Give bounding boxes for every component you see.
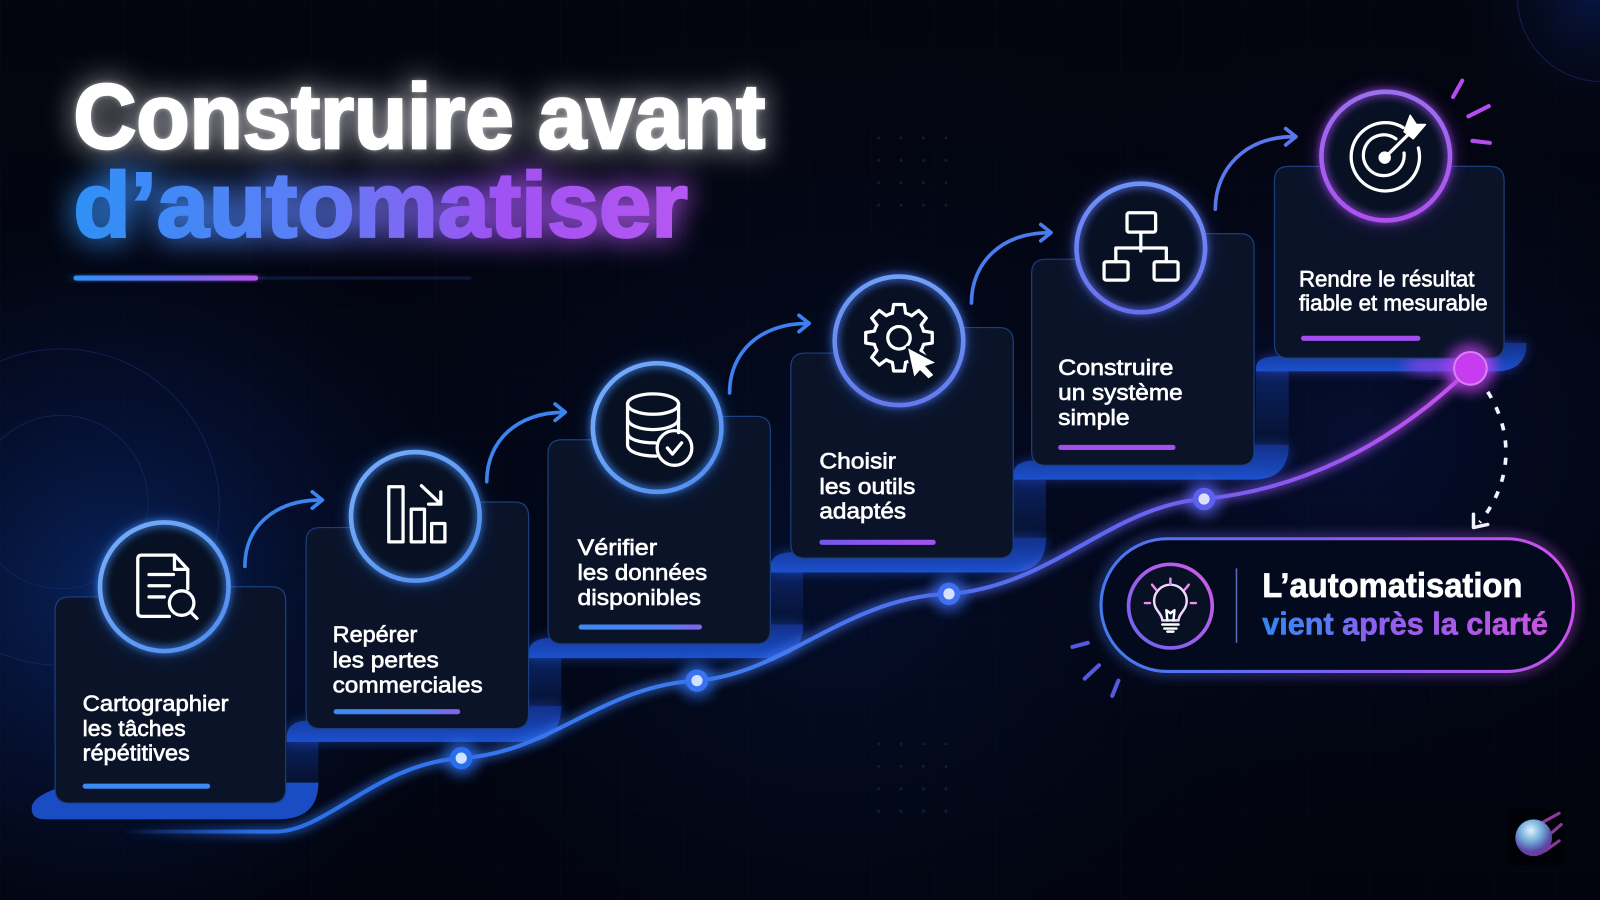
badge 4: gear and cursor [835,277,963,405]
card 5 accent bar [1058,445,1176,450]
icon: hierarchy [1104,213,1178,280]
card 4 text: les outils [819,474,915,499]
progress node 4 [1187,482,1221,516]
card 1 [55,587,286,803]
card 1 text: répétitives [83,741,190,766]
card 6 text: fiable et mesurable [1299,291,1488,316]
card 4 text: Choisir [819,448,896,473]
title: d’automatiser [73,155,688,257]
card 3 text: disponibles [578,585,701,610]
divider [1236,568,1237,643]
badge 1: document search [100,522,229,651]
pill rays [1072,643,1118,696]
badge 2: declining bars [351,452,480,581]
icon: gear with cursor [866,304,935,378]
step arrow 5 [1215,129,1296,209]
card 4 text: adaptés [819,498,906,523]
target rays [1453,81,1490,143]
progress end node [1446,344,1495,393]
step arrow 1 [245,492,322,566]
card 6 accent bar [1301,336,1420,341]
badge 3: database check [593,363,721,492]
title: Construire avant [73,66,765,168]
card 2 text: les pertes [333,647,439,672]
card 3 text: Vérifier [578,535,658,560]
card 5 text: Construire [1058,355,1173,380]
card 6 text: Rendre le résultat [1299,267,1475,292]
badge 5: org chart [1077,184,1205,312]
card 1 text: Cartographier [83,691,229,716]
card 5 text: simple [1058,405,1130,430]
dashed arrow to conclusion [1473,392,1506,528]
conclusion pill [1101,539,1573,671]
icon: document with magnifier [138,555,197,618]
card 4 accent bar [819,540,936,545]
logo [1508,809,1564,864]
step arrow 2 [487,404,565,482]
conclusion text: vient après la clarté [1262,606,1548,642]
card 3 text: les données [578,560,707,585]
card 2 [306,502,529,729]
title: Construire avant [73,66,765,168]
conclusion text [1262,567,1548,642]
staircase base [32,343,1527,819]
icon: bar chart down [389,486,445,542]
step arrow 3 [730,315,809,393]
step arrow 4 [971,224,1051,303]
icon: database with check [628,394,692,465]
conclusion text: L’automatisation [1262,567,1522,605]
card 1 accent bar [83,784,210,789]
card 2 text: Repérer [333,622,418,647]
progress node 2 [680,663,714,698]
card 1 text: les tâches [83,716,186,741]
progress node 1 [444,741,479,776]
title [73,66,765,257]
progress curve [122,368,1470,832]
card 2 text: commerciales [333,672,483,697]
title: Construire avant [73,66,765,168]
card 3 accent bar [579,624,702,630]
card 6 text [1299,267,1488,316]
card 3 text [578,535,707,610]
card 3 [548,416,770,644]
card 4 [791,328,1013,558]
card 5 text: un système [1058,380,1183,405]
title underline [73,276,471,281]
title: d’automatiser [73,155,688,257]
card 5 [1032,234,1254,465]
card 4 text [819,448,915,523]
card 2 accent bar [334,709,460,714]
icon: light bulb [1129,564,1212,648]
progress node 3 [932,577,966,611]
badge 6: target [1321,92,1450,220]
card 2 text [333,622,483,697]
card 6 [1274,166,1504,358]
icon: target with arrow [1351,115,1426,191]
card 5 text [1058,355,1183,430]
card 1 text [83,691,229,766]
